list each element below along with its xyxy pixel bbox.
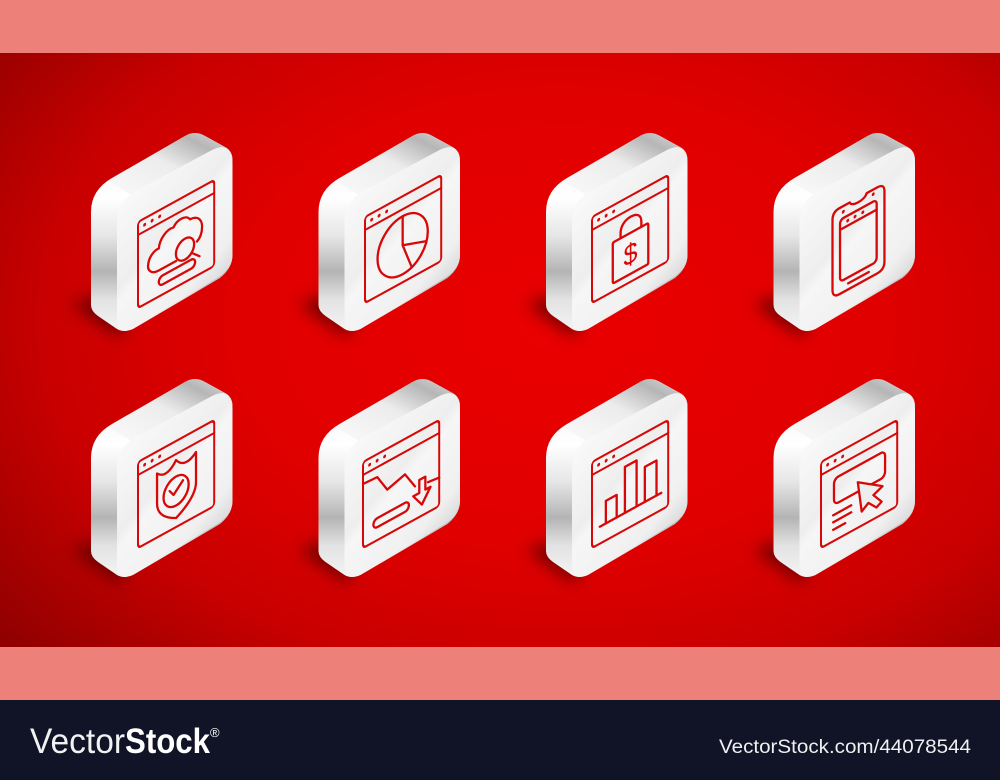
icon: security shield: [138, 420, 214, 548]
tile: click cursor window: [754, 379, 915, 582]
logo: [30, 722, 220, 761]
icon: smartphone: [832, 183, 884, 298]
icon: shopping bag with dollar: $: [624, 235, 638, 275]
tile: shopping bag window: [527, 133, 688, 336]
icon: cloud search: [138, 180, 214, 308]
logo: ®: [210, 725, 220, 740]
red panel: [0, 53, 1000, 647]
footer bar: [0, 700, 1000, 780]
icon: bar chart: [592, 420, 668, 548]
tile: bar chart window: [527, 379, 688, 582]
tile: falling chart window: [300, 379, 460, 582]
tile: shield window: [72, 379, 233, 582]
tile: cloud search window: [72, 133, 233, 336]
image id: VectorStock.com/44078544: [719, 737, 971, 758]
tile: smartphone: [754, 133, 915, 336]
icon: pie chart: [365, 175, 441, 303]
icon: shopping bag with dollar: [592, 175, 668, 303]
tile: pie chart window: [300, 133, 460, 336]
logo: Vector: [30, 722, 125, 761]
logo: Stock: [125, 722, 210, 761]
icon: falling chart: [363, 420, 439, 548]
icon: cursor on button: [821, 420, 897, 548]
